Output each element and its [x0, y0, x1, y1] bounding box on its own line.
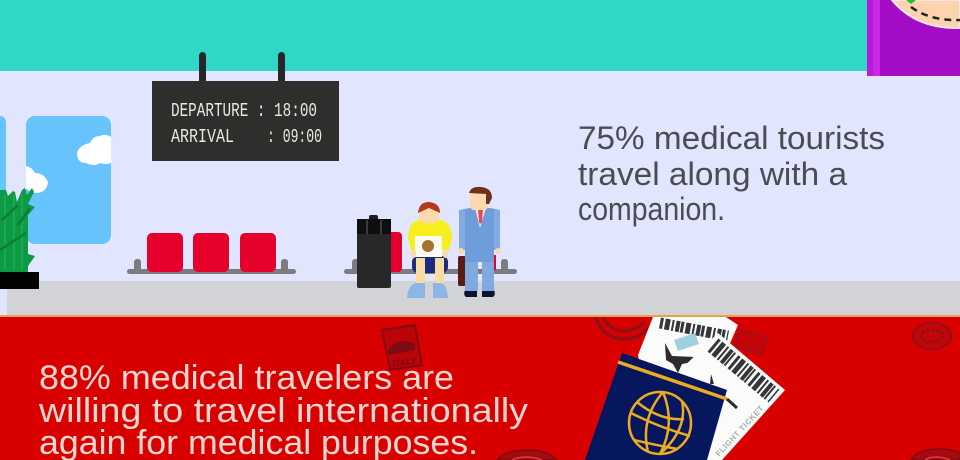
- icon: front flight ticket: [660, 333, 785, 460]
- icon: back flight ticket: [638, 317, 738, 385]
- text: companion statistic: 75% medical tourists: [578, 120, 885, 156]
- icon: occupied seats bench: [344, 232, 517, 274]
- icon: brown briefcase: [458, 256, 466, 286]
- icon: round stamp top: [596, 318, 650, 339]
- icon: purple bag with dashed patch: [867, 0, 960, 76]
- icon: oval stamp right: [913, 323, 951, 349]
- text: companion statistic: travel along with a: [578, 156, 847, 192]
- icon: lower cloud: [26, 166, 48, 193]
- icon: plane silhouette: [665, 343, 695, 373]
- panel: airport waiting room wall: [0, 71, 960, 282]
- icon: potted bamboo plant: [0, 188, 39, 289]
- board text: arrival time: : 09:00: [267, 126, 322, 148]
- icon: round stamp bottom right: [911, 449, 960, 460]
- text: returning travelers statistic: willing to travel internationally: [38, 392, 529, 430]
- icon: gold globe: [629, 392, 691, 454]
- text: ticket label: FLIGHT TICKET: [714, 404, 766, 458]
- icon: Italy stamp: ITALY: [392, 355, 417, 369]
- icon: round stamp bottom center: [497, 450, 557, 460]
- icon: Italy stamp: [382, 325, 422, 370]
- text: companion statistic: companion.: [578, 191, 725, 227]
- board text: departure: DEPARTURE : 18:00: [171, 100, 317, 122]
- icon: black suitcase: [357, 215, 391, 288]
- text: returning travelers statistic: [38, 359, 529, 460]
- panel: red passport section: [0, 315, 960, 460]
- text: companion statistic: [578, 120, 885, 227]
- icon: seated boy with laptop: [407, 202, 452, 298]
- icon: empty red seats: [127, 233, 296, 274]
- icon: man in blue suit: [458, 187, 501, 297]
- panel: teal top band: [0, 0, 960, 71]
- icon: small stamp near tickets: [735, 330, 767, 354]
- icon: left window: [0, 116, 6, 244]
- icon: departure board: [152, 52, 339, 161]
- text: returning travelers statistic: 88% medical travelers are: [39, 359, 454, 397]
- panel: airport floor: [0, 281, 960, 316]
- icon: window with clouds: [26, 116, 111, 244]
- board text: arrival: ARRIVAL: [171, 126, 234, 148]
- icon: upper cloud: [77, 135, 111, 165]
- icon: passport with globe: [585, 353, 737, 460]
